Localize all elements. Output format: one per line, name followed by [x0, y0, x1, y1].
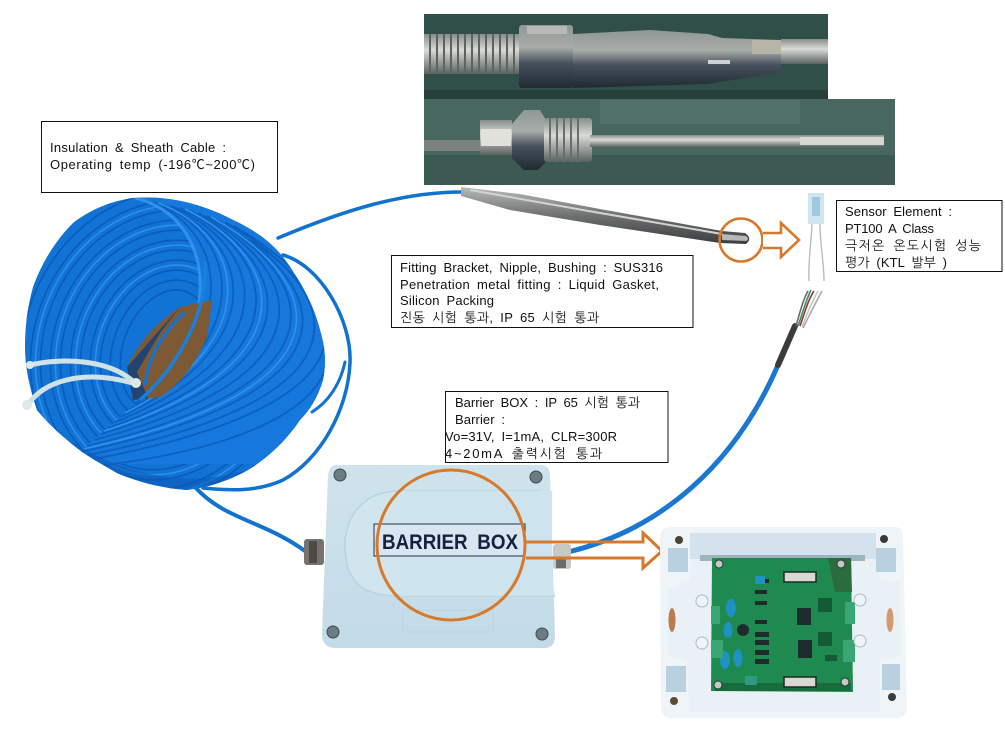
barrier box enclosure: [304, 465, 571, 648]
text box: insulation and sheath cable: Insulation & Sheath Cable :: [50, 140, 226, 155]
screws: [327, 469, 548, 640]
circuit board: [711, 558, 855, 692]
box label: [374, 524, 525, 556]
text box: sensor element: 평가 (KTL 발부 ): [845, 255, 947, 270]
text box: barrier box specs: Barrier BOX : IP 65 시험 통과: [455, 395, 640, 410]
arrow to sensor element: [763, 223, 799, 257]
cable glands: [304, 539, 571, 569]
text box: fitting bracket: Penetration metal fitting : Liquid Gasket,: [400, 277, 659, 292]
arrow to open enclosure: [526, 533, 662, 568]
text box: insulation and sheath cable: Operating temp (-196℃~200℃): [50, 157, 255, 172]
coil body: [25, 198, 325, 490]
blue capacitors: [720, 576, 765, 685]
text box: fitting bracket: Silicon Packing: [400, 293, 494, 308]
sensor element: [808, 193, 824, 281]
board screws: [714, 560, 849, 689]
text box: fitting bracket: [392, 256, 693, 328]
fuses: [784, 572, 816, 687]
text box: sensor element: [836, 200, 1002, 272]
box label: BARRIER BOX: [382, 531, 518, 554]
text box: barrier box specs: 4~20mA 출력시험 통과: [445, 446, 602, 461]
text box: barrier box specs: Vo=31V, I=1mA, CLR=300R: [445, 429, 617, 444]
callout circle on probe tip: [720, 218, 762, 262]
text box: insulation and sheath cable: [42, 122, 278, 192]
loose blue cables: [195, 192, 795, 552]
photo: threaded fitting close-up: [424, 14, 895, 185]
exposed cable wires: [796, 290, 822, 328]
text box: fitting bracket: 진동 시험 통과, IP 65 시험 통과: [400, 310, 599, 325]
text box: sensor element: Sensor Element :: [845, 204, 952, 219]
mounting posts: [696, 594, 866, 649]
callout circle on barrier box: [377, 470, 525, 620]
IC chips: [737, 579, 812, 664]
cable tie: [22, 361, 141, 410]
probe sheath: [461, 187, 749, 244]
open enclosure with circuit board: [660, 527, 907, 718]
text box: sensor element: 극저온 온도시험 성능: [845, 238, 981, 253]
text box: sensor element: PT100 A Class: [845, 221, 934, 236]
text box: barrier box specs: [445, 392, 668, 462]
text box: fitting bracket: Fitting Bracket, Nipple, Bushing : SUS316: [400, 260, 663, 275]
text box: barrier box specs: Barrier :: [455, 412, 505, 427]
blue cable coil: [22, 198, 325, 490]
terminal blocks: [711, 602, 855, 662]
wooden core: [127, 300, 212, 400]
